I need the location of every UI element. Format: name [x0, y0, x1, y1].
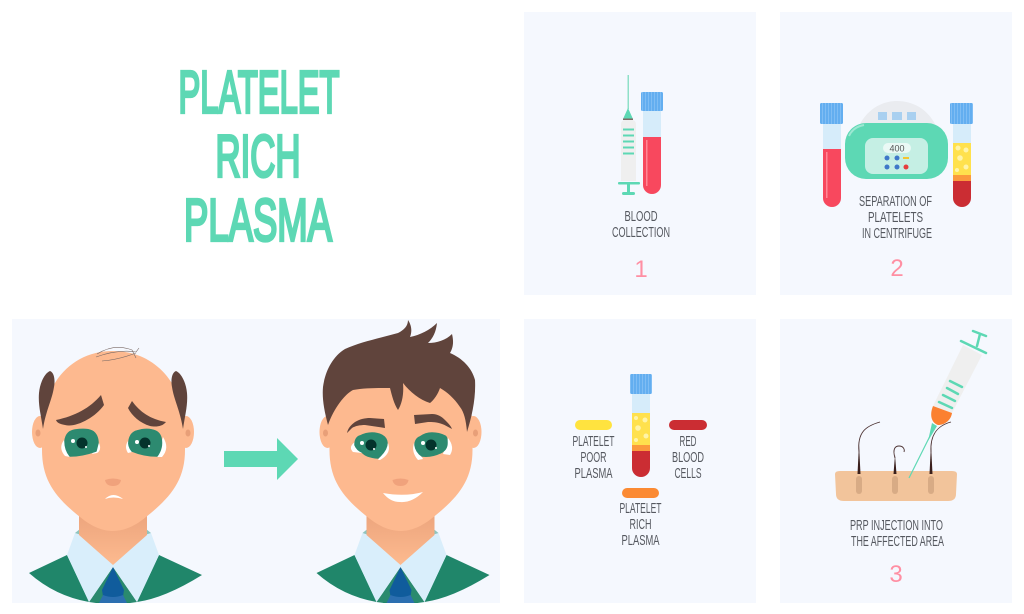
- face: after treatment: [316, 320, 490, 604]
- icon: centrifuge: [845, 101, 948, 179]
- caption: [850, 517, 944, 550]
- icon: left blood tube: [820, 103, 843, 207]
- panel: centrifuge separation: [780, 12, 1012, 295]
- panel: blood components: [524, 319, 756, 603]
- caption: THE AFFECTED AREA: [851, 533, 944, 550]
- panel: before and after: [12, 319, 500, 604]
- hair patches: [39, 371, 187, 429]
- label: red blood cells: [669, 420, 707, 482]
- icon: blood tube: [641, 92, 663, 194]
- label: red blood cells: BLOOD: [672, 449, 704, 466]
- label: red blood cells: RED: [680, 433, 697, 450]
- label: platelet rich plasma: RICH: [630, 516, 652, 533]
- face: before treatment: [29, 347, 202, 604]
- arrow: [224, 438, 298, 480]
- label: platelet poor plasma: [572, 420, 614, 482]
- caption: SEPARATION OF: [859, 193, 932, 210]
- step number 1: 1: [634, 256, 648, 283]
- icon: skin with hair: [835, 422, 957, 501]
- eyes: [61, 429, 166, 457]
- smile: [383, 492, 423, 502]
- title: PLATELET: [178, 60, 340, 126]
- hair: [323, 320, 475, 432]
- panel: PRP injection: [780, 319, 1012, 603]
- icon: centrifuge: 400: [889, 144, 905, 154]
- step number 2: 2: [890, 255, 904, 282]
- icon: syringe: [618, 75, 640, 195]
- label: platelet rich plasma: PLASMA: [622, 532, 660, 549]
- label: platelet poor plasma: POOR: [580, 449, 607, 466]
- label: platelet poor plasma: PLATELET: [572, 433, 614, 450]
- caption: COLLECTION: [612, 224, 670, 241]
- title: PLASMA: [184, 188, 332, 254]
- caption: BLOOD: [624, 208, 658, 225]
- label: platelet poor plasma: PLASMA: [574, 465, 612, 482]
- caption: PRP INJECTION INTO: [850, 517, 943, 534]
- icon: syringe: [909, 331, 986, 478]
- eyebrows: [347, 414, 452, 433]
- label: platelet rich plasma: [620, 488, 662, 549]
- sad mouth: [105, 495, 123, 499]
- label: red blood cells: CELLS: [674, 465, 702, 482]
- icon: separated tube: [950, 103, 973, 207]
- label: platelet rich plasma: PLATELET: [620, 500, 662, 517]
- title: [178, 60, 340, 254]
- caption: IN CENTRIFUGE: [862, 225, 932, 242]
- title: RICH: [216, 124, 300, 190]
- caption: [612, 208, 670, 241]
- eyes: [351, 433, 452, 460]
- icon: separated tube: [630, 374, 652, 477]
- caption: PLATELETS: [868, 209, 923, 226]
- caption: [859, 193, 932, 242]
- strands of hair: [96, 347, 139, 361]
- panel: blood collection: [524, 12, 756, 295]
- step number 3: 3: [889, 561, 903, 588]
